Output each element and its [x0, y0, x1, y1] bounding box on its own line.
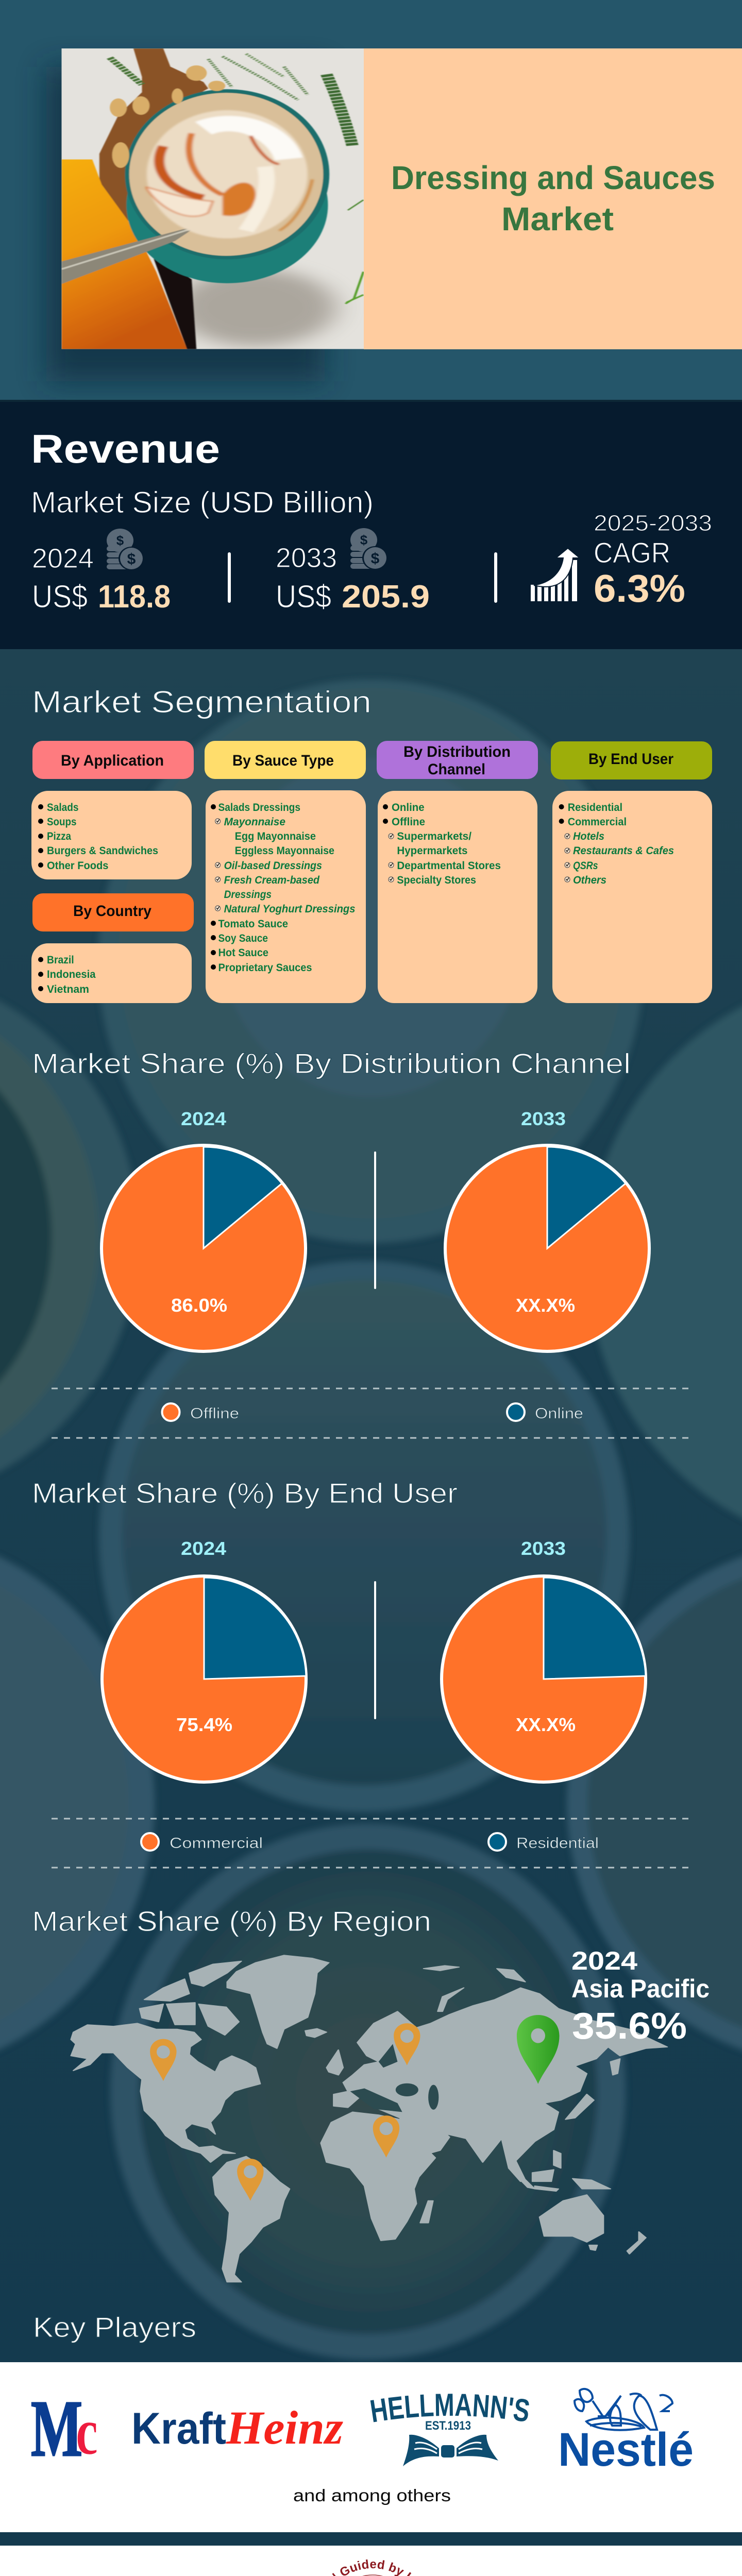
icon: pin europe — [394, 2023, 420, 2065]
header: by end user: By End User — [588, 751, 673, 768]
header: by application: By Application — [61, 752, 164, 769]
list: sauce type: Oil-based Dressings — [224, 860, 322, 872]
icon: pin north america — [150, 2039, 177, 2081]
legend: end user — [52, 1819, 695, 1868]
divider — [228, 552, 231, 603]
panel: footer — [0, 2546, 742, 2576]
list: sauce type — [206, 790, 366, 1003]
header: by application — [32, 741, 194, 779]
legend: end user: Commercial — [170, 1835, 263, 1852]
callout: asia pacific share: 2024 — [571, 1946, 637, 1975]
list: distribution channel: Hypermarkets — [397, 845, 468, 857]
pie chart: end user 2024: 2024 — [181, 1538, 226, 1559]
legend: distribution channel: Offline — [190, 1405, 239, 1422]
panel: key players logos — [0, 2362, 742, 2532]
icon: coins 2024: $ — [116, 533, 124, 548]
icon: pin south america — [237, 2159, 264, 2201]
stat: CAGR: 2025-2033 — [594, 511, 712, 536]
list: country — [31, 943, 192, 1003]
pie chart: end user 2024 — [102, 1538, 306, 1782]
stat: 2024 — [32, 543, 171, 615]
header: by country — [32, 893, 194, 931]
icon: coins 2033 — [350, 528, 388, 570]
icon: coins 2024: $ — [127, 551, 136, 568]
list: sauce type: Tomato Sauce — [218, 918, 288, 930]
list: end user: Residential — [568, 802, 622, 814]
list: country: Indonesia — [47, 969, 96, 980]
legend: end user: Residential — [516, 1835, 599, 1852]
stat: 2024: US$ — [32, 579, 88, 615]
heading: key players: Key Players — [33, 2311, 196, 2343]
list: distribution channel: Online — [392, 802, 425, 814]
stat: CAGR: CAGR — [594, 536, 670, 569]
list: sauce type: Dressings — [224, 889, 272, 901]
divider — [494, 552, 497, 603]
list: sauce type: Egg Mayonnaise — [235, 831, 316, 842]
hero photo: bowl of dressing — [61, 48, 364, 349]
pie chart: distribution channel 2033: XX.X% — [516, 1295, 575, 1316]
pie chart: end user 2033: XX.X% — [516, 1714, 576, 1735]
revenue panel — [0, 402, 742, 649]
panel: segmentation — [31, 741, 712, 1003]
map: continents — [71, 1955, 667, 2282]
legend: distribution channel: Online — [535, 1405, 583, 1422]
stat: 2033: 205.9 — [342, 579, 430, 615]
logo: Kraft Heinz: Kraft — [131, 2404, 226, 2453]
stat: 2024: 118.8 — [98, 579, 171, 615]
header: by distribution channel: Channel — [428, 761, 485, 778]
stat: 2033: US$ — [276, 579, 331, 615]
legend: distribution channel — [52, 1388, 695, 1438]
logo: McCormick: c — [76, 2395, 98, 2469]
subheading: market size: Market Size (USD Billion) — [31, 486, 374, 519]
pie chart: distribution channel 2024: 2024 — [181, 1108, 226, 1129]
list: sauce type: Salads Dressings — [218, 802, 300, 814]
icon: coins 2024 — [107, 529, 144, 570]
list: end user: Restaurants & Cafes — [573, 845, 674, 857]
header: by distribution channel — [377, 741, 538, 779]
text: and among others: and among others — [293, 2486, 451, 2505]
logo: Hellmann's: EST.1913 — [425, 2419, 471, 2433]
pie chart: distribution channel 2024: 86.0% — [171, 1295, 227, 1316]
logo: Hellmann's — [370, 2394, 529, 2466]
list: sauce type: Mayonnaise — [224, 816, 285, 828]
list: country: Vietnam — [47, 984, 89, 995]
hero band — [0, 0, 742, 402]
list: end user: QSRs — [573, 860, 598, 872]
header: by end user — [551, 741, 712, 779]
footer band — [0, 2532, 742, 2546]
list: sauce type: Hot Sauce — [218, 947, 268, 959]
stat: 2033: 2033 — [276, 543, 337, 573]
logo: Hellmann's: HELLMANN'S — [370, 2394, 529, 2422]
divider — [374, 1581, 376, 1719]
list: country: Brazil — [47, 954, 74, 966]
pie chart: distribution channel 2024 — [102, 1108, 306, 1351]
logo: Nestlé — [558, 2389, 694, 2476]
list: end user: Others — [573, 874, 606, 886]
heading: market segmentation: Market Segmentation — [32, 685, 372, 719]
header: by country: By Country — [73, 903, 151, 920]
list: application: Pizza — [47, 831, 71, 842]
stat: CAGR — [594, 511, 712, 610]
list: application: Soups — [47, 816, 76, 828]
list: application: Burgers & Sandwiches — [47, 845, 158, 857]
icon: pin asia pacific — [517, 2015, 560, 2084]
title: Market — [501, 200, 614, 238]
logo: Kraft Heinz — [131, 2401, 343, 2454]
list: sauce type: Eggless Mayonnaise — [235, 845, 334, 857]
list: sauce type: Fresh Cream-based — [224, 874, 320, 886]
stat: CAGR: 6.3% — [594, 567, 685, 610]
stat: 2033 — [276, 543, 430, 615]
header: by sauce type — [205, 741, 366, 779]
stat: 2024: 2024 — [32, 543, 94, 574]
image drop shadow — [46, 67, 325, 381]
logo: Nestlé: Nestlé — [558, 2424, 694, 2476]
list: end user: Commercial — [568, 816, 627, 828]
list: sauce type: Soy Sauce — [218, 933, 268, 944]
icon: coins 2033: $ — [360, 532, 368, 548]
list: distribution channel: Specialty Stores — [397, 874, 476, 886]
list: distribution channel: Offline — [392, 816, 425, 828]
callout: asia pacific share — [571, 1946, 710, 2047]
list: application: Salads — [47, 802, 78, 814]
icon: pin africa — [373, 2115, 399, 2158]
logo: Kraft Heinz: Heinz — [226, 2401, 343, 2454]
heading: share by end user: Market Share (%) By End User — [32, 1477, 458, 1509]
list: end user: Hotels — [573, 831, 604, 842]
title: Dressing and Sauces — [391, 159, 715, 196]
pie chart: distribution channel 2033 — [445, 1108, 649, 1351]
title panel — [364, 48, 742, 349]
header: by sauce type: By Sauce Type — [232, 752, 334, 769]
list: application — [31, 791, 192, 879]
pie chart: distribution channel 2033: 2033 — [521, 1108, 566, 1129]
header: by distribution channel: By Distribution — [403, 743, 511, 760]
heading: revenue: Revenue — [31, 426, 220, 471]
pie chart: end user 2024: 75.4% — [176, 1714, 232, 1735]
list: distribution channel — [378, 791, 537, 1003]
icon: coins 2033: $ — [371, 550, 380, 567]
callout: asia pacific share: Asia Pacific — [571, 1974, 710, 2003]
list: sauce type: Proprietary Sauces — [218, 962, 312, 974]
heading: share by region: Market Share (%) By Region — [32, 1905, 431, 1937]
list: distribution channel: Supermarkets/ — [397, 831, 471, 842]
callout: asia pacific share: 35.6% — [572, 2006, 687, 2047]
list: application: Other Foods — [47, 860, 108, 872]
logo: McCormick: M — [31, 2384, 82, 2473]
divider — [374, 1151, 376, 1289]
title — [391, 159, 715, 238]
heading: share by distribution channel: Market Share (%) By Distribution Channel — [32, 1047, 631, 1079]
page background: bowls — [0, 649, 742, 2401]
list: sauce type: Natural Yoghurt Dressings — [224, 903, 356, 915]
icon: growth chart arrow — [531, 548, 580, 601]
list: end user — [552, 791, 712, 1003]
pie chart: end user 2033 — [442, 1538, 646, 1782]
pie chart: end user 2033: 2033 — [521, 1538, 566, 1559]
world map with pins — [71, 1955, 667, 2282]
list: distribution channel: Departmental Stores — [397, 860, 501, 872]
map: inland seas — [350, 2044, 439, 2112]
